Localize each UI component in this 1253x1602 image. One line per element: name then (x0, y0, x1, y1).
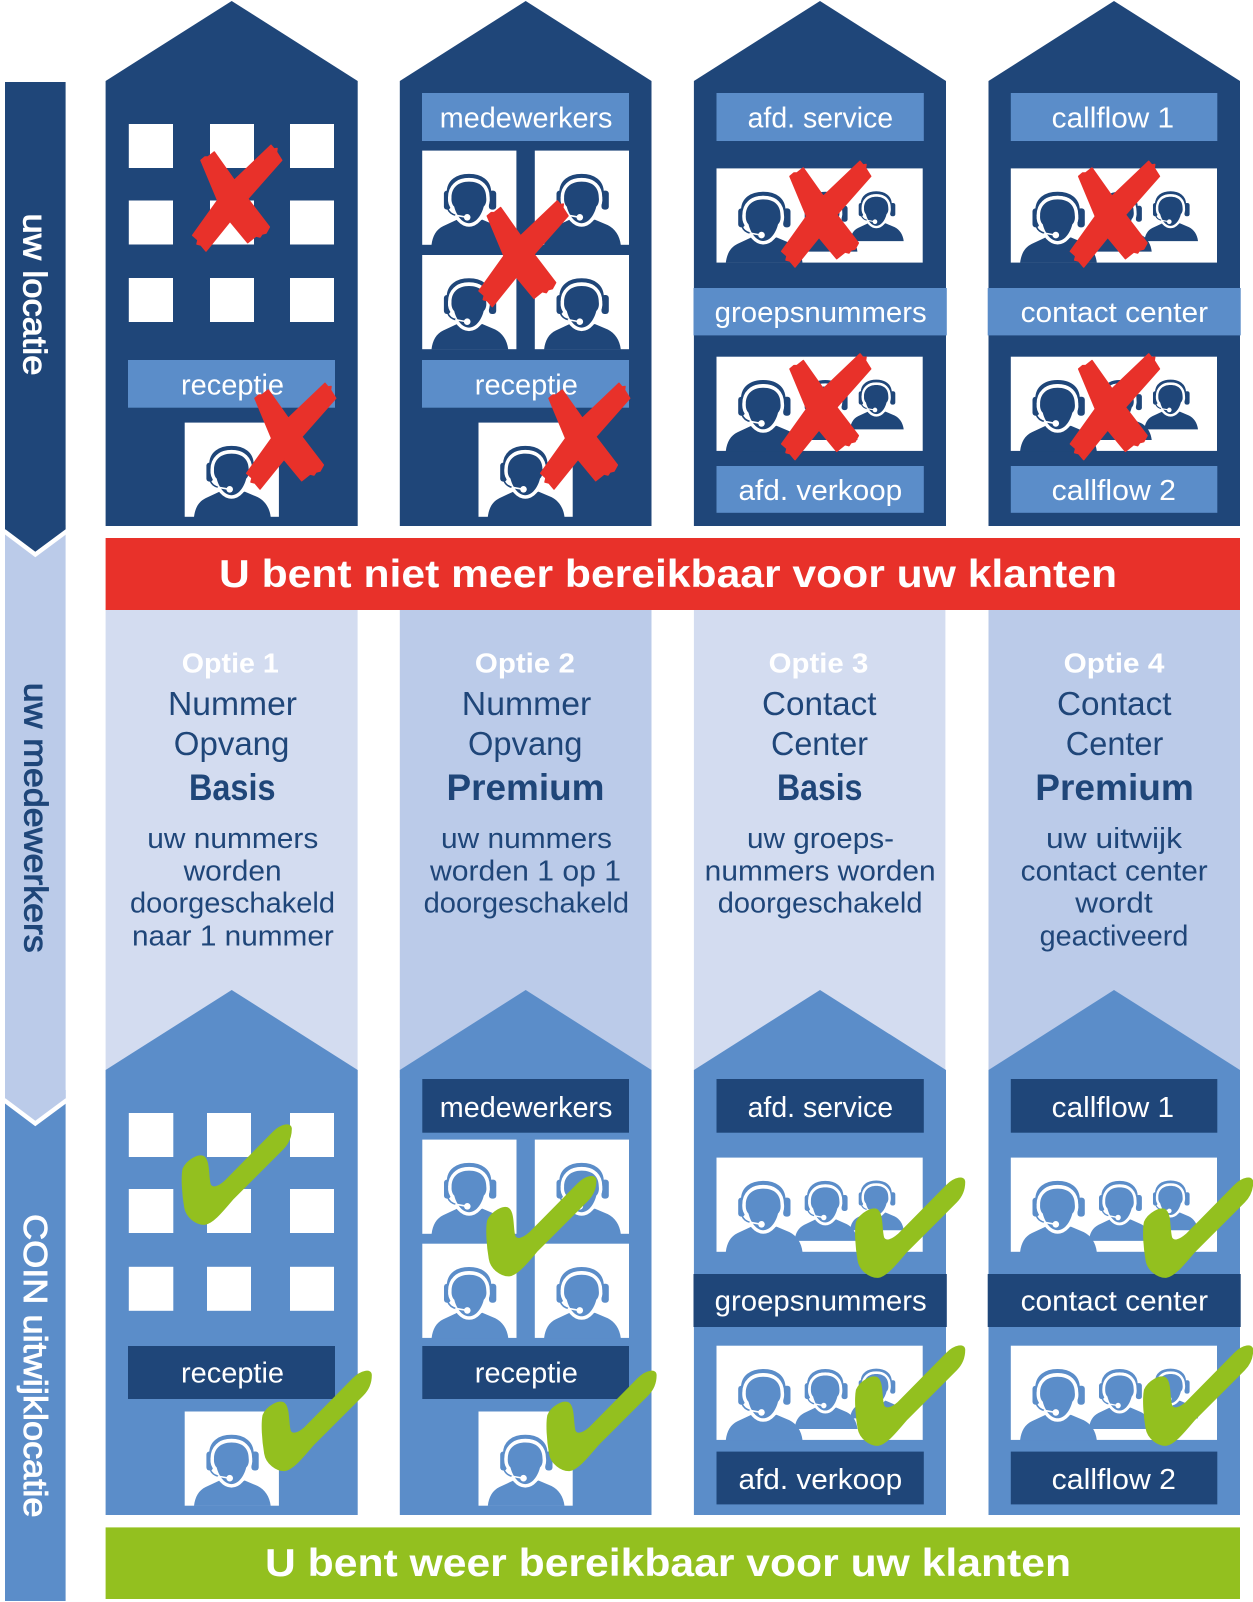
banner: weer bereikbaar: U bent weer bereikbaar voor uw klanten (265, 1542, 1071, 1585)
sidebar segment: uw locatie (5, 82, 66, 552)
sidebar chevron outline upper (4, 531, 67, 554)
text block: optie 2 (424, 647, 629, 920)
label bar: groepsnummers: groepsnummers (715, 297, 927, 329)
text block: optie 3: nummers worden (705, 856, 936, 888)
icon: receptionist (478, 1412, 573, 1506)
label bar: contact center: contact center (1021, 1285, 1208, 1317)
text block: optie 2: Premium (446, 767, 604, 808)
label bar: groepsnummers (694, 1274, 947, 1327)
text block: optie 4: uw uitwijk (1046, 823, 1183, 855)
icon: green check upper (856, 1178, 965, 1277)
text block: optie 3: Optie 3 (769, 647, 868, 678)
icon: red cross lower (1070, 354, 1159, 460)
label bar: receptie: receptie (475, 370, 578, 402)
text block: optie 3: Contact (762, 686, 877, 723)
panel: building 4 bottom, contact center (988, 990, 1253, 1515)
text block: optie 4: wordt (1074, 888, 1153, 920)
icon: green check reception (262, 1371, 371, 1471)
text block: optie 2: doorgeschakeld (424, 888, 629, 920)
sidebar segment: uw medewerkers (5, 525, 66, 1121)
text block: optie 3: Center (771, 726, 868, 763)
text block: optie 1: Basis (189, 767, 276, 808)
text block: optie 1: Optie 1 (182, 647, 279, 678)
panel: building 1 bottom, windows and reception (106, 990, 371, 1515)
text block: optie 2: Opvang (468, 726, 582, 763)
icon: red cross upper (782, 161, 871, 267)
sidebar label: uw locatie: uw locatie (16, 214, 54, 376)
label bar: callflow 2: callflow 2 (1052, 475, 1176, 507)
text block: optie 2: uw nummers (441, 823, 612, 855)
label bar: callflow 1 (1011, 93, 1217, 141)
icon: green check windows (182, 1125, 291, 1224)
panel: building 3 top, group numbers (694, 1, 947, 526)
text block: optie 1: Nummer (168, 686, 297, 723)
label bar: callflow 2 (1011, 1452, 1217, 1504)
label bar: afd. verkoop (716, 1452, 924, 1504)
label bar: afd. verkoop: afd. verkoop (738, 1464, 902, 1496)
label bar: callflow 2: callflow 2 (1052, 1464, 1176, 1496)
sidebar label: COIN uitwijklocatie: COIN uitwijklocatie (17, 1214, 54, 1518)
label bar: receptie (422, 360, 629, 408)
label bar: contact center (988, 1274, 1241, 1327)
label bar: receptie: receptie (181, 370, 284, 402)
icon: agents callflow 1 (1011, 168, 1217, 263)
icon: agents callflow 1 (1011, 1158, 1217, 1252)
icon: green check lower (856, 1346, 965, 1445)
icon: agents service (716, 1158, 923, 1252)
label bar: contact center (988, 288, 1241, 335)
icon: green check upper (1144, 1178, 1253, 1277)
text block: optie 4: Center (1066, 726, 1163, 763)
sidebar segment: COIN uitwijklocatie (5, 1090, 66, 1601)
icons: four employees (422, 1140, 629, 1338)
label bar: afd. service (716, 93, 924, 141)
icon: agents sales (716, 1346, 923, 1440)
sidebar label: uw medewerkers: uw medewerkers (18, 683, 54, 953)
icon: agents callflow 2 (1011, 1346, 1217, 1440)
icon: red cross lower (782, 354, 871, 460)
label bar: receptie (128, 360, 335, 408)
label bar: medewerkers (422, 1079, 629, 1133)
icon: receptionist (478, 423, 573, 517)
icon: receptionist (185, 1412, 279, 1506)
text block: optie 4: geactiveerd (1040, 921, 1188, 953)
icon: green check reception (547, 1371, 656, 1471)
panel: building 3 bottom, group numbers (694, 990, 965, 1515)
label bar: medewerkers (422, 93, 629, 141)
text block: optie 2: Optie 2 (475, 647, 575, 678)
icon: red cross reception (247, 383, 336, 489)
icon: red cross employees (479, 201, 568, 307)
label bar: afd. verkoop: afd. verkoop (738, 475, 902, 507)
label bar: groepsnummers: groepsnummers (715, 1285, 927, 1317)
icon: green check employees (487, 1176, 596, 1276)
label bar: medewerkers: medewerkers (440, 1092, 612, 1124)
label bar: afd. service: afd. service (748, 103, 893, 135)
label bar: callflow 1: callflow 1 (1052, 1092, 1174, 1124)
panel: building 4 top, contact center (988, 1, 1241, 526)
banner: weer bereikbaar (106, 1527, 1240, 1599)
sidebar: three stage arrows (4, 82, 67, 1601)
text block: optie 3: doorgeschakeld (718, 888, 922, 920)
text block: optie 4: contact center (1021, 856, 1208, 888)
text block: optie 4: Contact (1057, 686, 1172, 723)
panel: building 2 bottom, employees and reception (400, 990, 656, 1515)
text block: optie 4: Optie 4 (1064, 647, 1165, 678)
icons: four employees (422, 151, 629, 349)
label bar: callflow 1: callflow 1 (1052, 103, 1174, 135)
label bar: callflow 1 (1011, 1079, 1217, 1133)
text block: optie 1: naar 1 nummer (132, 921, 334, 953)
sidebar chevron outline lower (4, 1100, 67, 1124)
label bar: afd. verkoop (716, 466, 924, 513)
text block: optie 2: Nummer (462, 686, 591, 723)
label bar: receptie: receptie (475, 1358, 578, 1390)
text block: optie 1: worden (183, 856, 282, 888)
label bar: afd. service (716, 1079, 924, 1133)
label bar: afd. service: afd. service (748, 1092, 893, 1124)
label bar: receptie: receptie (181, 1358, 284, 1390)
text block: optie 1: doorgeschakeld (130, 888, 335, 920)
icon: red cross windows (193, 145, 282, 251)
text block: optie 3: uw groeps- (747, 823, 894, 855)
icon: receptionist (185, 423, 279, 517)
text block: optie 1: Opvang (174, 726, 289, 763)
banner: niet bereikbaar (106, 538, 1240, 610)
banner: niet bereikbaar: U bent niet meer bereikbaar voor uw klanten (219, 553, 1117, 596)
label bar: callflow 2 (1011, 466, 1217, 513)
text block: optie 4 (1021, 647, 1208, 953)
label bar: receptie (128, 1346, 335, 1399)
text block: optie 4: Premium (1035, 767, 1194, 808)
panel: building 2 top, employees and reception (400, 1, 652, 526)
icon: green check lower (1144, 1346, 1253, 1445)
icon: red cross upper (1070, 161, 1159, 267)
icon: agents sales (716, 357, 923, 451)
text block: optie 2: worden 1 op 1 (429, 856, 621, 888)
label bar: groepsnummers (694, 288, 947, 335)
text block: optie 3 (705, 647, 936, 920)
text block: optie 1: uw nummers (147, 823, 318, 855)
panel: building 1 top, windows and reception (106, 1, 358, 526)
panel: option column backgrounds (106, 608, 1240, 1078)
label bar: medewerkers: medewerkers (440, 103, 612, 135)
icon: agents callflow 2 (1011, 357, 1217, 451)
label bar: receptie (422, 1346, 629, 1399)
icon: agents service (716, 168, 923, 263)
text block: optie 3: Basis (777, 767, 862, 808)
label bar: contact center: contact center (1021, 297, 1208, 329)
text block: optie 1 (130, 647, 335, 953)
icon: red cross reception (541, 383, 630, 489)
